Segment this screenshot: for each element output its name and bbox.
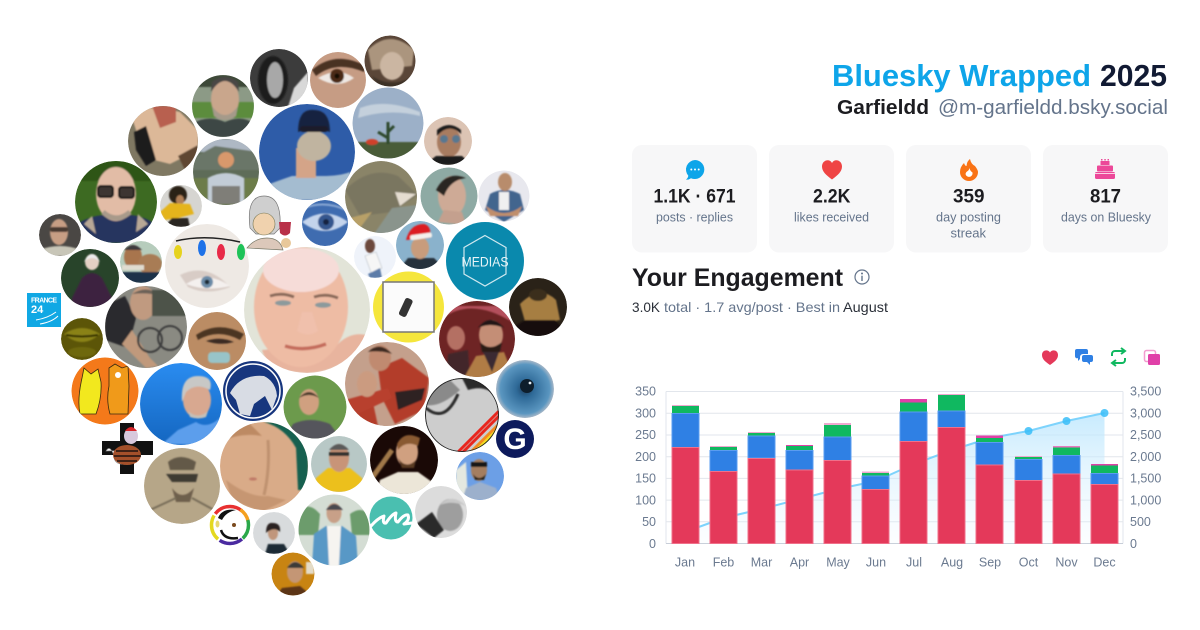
left axis labels: 150 xyxy=(635,472,656,486)
icon: speech bubble xyxy=(686,160,704,180)
left axis labels xyxy=(635,384,656,551)
right axis labels: 0 xyxy=(1130,537,1137,551)
user name and handle: Garfieldd xyxy=(837,97,929,119)
right axis labels: 3,000 xyxy=(1130,406,1161,420)
month labels: Nov xyxy=(1055,556,1078,570)
right axis labels: 1,000 xyxy=(1130,494,1161,508)
right axis labels: 2,000 xyxy=(1130,450,1161,464)
avatar: man in profile xyxy=(420,168,478,225)
month labels: Jul xyxy=(906,556,922,570)
sticker: black cross with ball xyxy=(102,423,153,474)
avatar: man in nature xyxy=(284,376,346,440)
logo: France 24 xyxy=(27,293,61,327)
stat card: likes xyxy=(769,145,894,252)
avatar: sky and plant xyxy=(352,88,424,159)
month labels: Aug xyxy=(941,556,963,570)
stat label: day posting xyxy=(936,210,1001,224)
avatar: couple in plaid shirts xyxy=(345,342,429,426)
logo: Medias hexagon: MEDIAS xyxy=(462,254,508,270)
avatar: big bald man xyxy=(244,247,370,373)
avatar: bald man with glasses xyxy=(75,161,157,243)
engagement chart xyxy=(635,384,1161,570)
user name and handle xyxy=(837,97,1168,119)
avatar: man at the sea xyxy=(140,363,222,445)
legend: reposts xyxy=(1112,348,1125,366)
legend: quotes xyxy=(1144,350,1160,365)
month labels: Oct xyxy=(1019,556,1039,570)
engagement summary: 3.0K xyxy=(632,299,661,315)
avatar: hedgehog xyxy=(345,161,418,234)
logo: Thundercats xyxy=(223,361,283,421)
cumulative line xyxy=(685,409,1108,532)
section heading: Your Engagement xyxy=(632,264,844,292)
right axis labels: 2,500 xyxy=(1130,428,1161,442)
cartoon wine glass xyxy=(279,222,291,236)
title: Bluesky Wrapped xyxy=(832,59,1091,93)
avatar: muscular torso xyxy=(220,422,308,512)
avatar: blue eye close up xyxy=(302,200,348,246)
avatar: man with cap from below xyxy=(259,104,355,200)
avatar: blue iris xyxy=(496,360,554,418)
logo: letter G: G xyxy=(503,423,527,456)
bar: Apr xyxy=(786,445,813,544)
avatar: black and white face with rainbow xyxy=(425,378,499,452)
bar: Feb xyxy=(710,446,737,544)
stat value: 359 xyxy=(953,186,984,208)
logo: Medias hexagon xyxy=(446,222,524,300)
left axis labels: 250 xyxy=(635,428,656,442)
month labels: Jun xyxy=(866,556,886,570)
bar: Jul xyxy=(900,399,927,544)
bar: Nov xyxy=(1053,446,1080,544)
bar: Oct xyxy=(1015,456,1042,544)
icon: heart xyxy=(822,160,842,180)
avatar: man with cat xyxy=(120,241,162,283)
cartoon body xyxy=(247,238,283,250)
avatar: small man with glasses xyxy=(39,214,81,256)
stat card: posts and replies xyxy=(632,145,757,252)
avatar: orange cartoon cats xyxy=(72,358,138,424)
engagement summary: total · 1.7 avg/post · Best in xyxy=(664,299,840,315)
avatar: man in blue suit xyxy=(298,494,370,566)
icon: info xyxy=(855,270,869,284)
stat card: days on Bluesky xyxy=(1043,145,1168,252)
legend: likes xyxy=(1042,350,1058,365)
logo: rainbow ring xyxy=(209,504,251,546)
cartoon hand xyxy=(281,238,291,248)
avatar: brown eye close up xyxy=(310,52,366,108)
left axis labels: 100 xyxy=(635,494,656,508)
month labels: Dec xyxy=(1093,556,1116,570)
logo: letter G xyxy=(496,420,534,458)
right axis labels: 3,500 xyxy=(1130,384,1161,398)
bar: Dec xyxy=(1091,464,1118,544)
left axis labels: 0 xyxy=(649,537,656,551)
avatar: man in blue shirt xyxy=(478,170,530,222)
month labels xyxy=(675,556,1116,570)
avatar: cartoon woman with wine xyxy=(247,196,291,250)
stat label second line: streak xyxy=(950,226,986,240)
left axis labels: 200 xyxy=(635,450,656,464)
stat value: 817 xyxy=(1090,186,1121,208)
grid lines xyxy=(666,392,1123,544)
avatar: man with bikes xyxy=(105,286,187,368)
avatar: grey man lying xyxy=(415,486,467,538)
avatar: woman on white xyxy=(354,236,396,278)
month labels: Mar xyxy=(751,556,772,570)
engagement summary xyxy=(632,299,888,315)
logo: France 24: FRANCE xyxy=(31,298,57,304)
avatar: eye with christmas lights xyxy=(165,224,249,308)
avatar cluster xyxy=(27,36,567,596)
right axis labels: 500 xyxy=(1130,515,1151,529)
right axis labels: 1,500 xyxy=(1130,472,1161,486)
avatar: chest on patterned fabric xyxy=(128,106,198,176)
stat label: posts · replies xyxy=(656,210,733,224)
left axis labels: 350 xyxy=(635,384,656,398)
cartoon face xyxy=(253,213,275,235)
icon: flame xyxy=(960,159,978,181)
avatar: brown eye with glitter xyxy=(188,312,246,370)
month labels: Feb xyxy=(713,556,734,570)
month labels: Apr xyxy=(790,556,809,570)
stat value: 2.2K xyxy=(813,186,851,208)
avatar: santa hat xyxy=(396,221,444,270)
avatar: man in floral shirt xyxy=(192,75,254,137)
bar: Jun xyxy=(862,472,889,544)
right axis labels xyxy=(1130,384,1161,551)
avatar: person with dark hair on grey xyxy=(253,512,295,554)
chart legend icons xyxy=(1042,348,1160,366)
bar: Mar xyxy=(748,432,775,544)
stat value: 1.1K · 671 xyxy=(654,186,736,208)
engagement summary: August xyxy=(843,299,888,315)
bar: Sep xyxy=(976,436,1003,544)
legend: replies xyxy=(1075,349,1093,365)
month labels: Sep xyxy=(979,556,1001,570)
avatar: man in yellow hoodie xyxy=(311,436,367,492)
avatar: purple cloak xyxy=(61,249,119,307)
logo: yellow circle with remote xyxy=(373,272,444,342)
bar: Aug xyxy=(938,394,965,544)
avatar: hiker in the mountains xyxy=(193,139,259,205)
avatar: sepia child xyxy=(364,36,416,88)
avatar: man with sunglasses and blue sky xyxy=(456,452,504,500)
stat label: days on Bluesky xyxy=(1061,210,1151,224)
user name and handle: @m-garfieldd.bsky.social xyxy=(938,97,1168,119)
bar: Jan xyxy=(672,405,699,544)
avatar: furry pilot xyxy=(509,278,567,336)
month labels: May xyxy=(826,556,851,570)
cumulative area xyxy=(685,413,1104,544)
avatar: bearded man on dark background xyxy=(370,426,438,495)
month labels: Jan xyxy=(675,556,695,570)
avatar: man on orange background xyxy=(272,552,314,596)
stacked bars xyxy=(672,394,1118,544)
icon: cake xyxy=(1095,159,1115,179)
avatar: pencil sketch xyxy=(144,448,220,524)
avatar: woman in yellow xyxy=(160,185,202,227)
stat card: posting streak xyxy=(906,145,1031,252)
title: 2025 xyxy=(1100,59,1167,93)
stat label: likes received xyxy=(794,210,869,224)
avatar: man with round glasses xyxy=(424,117,472,165)
left axis labels: 300 xyxy=(635,406,656,420)
left axis labels: 50 xyxy=(642,515,656,529)
avatar: olive lips xyxy=(61,318,103,360)
logo: teal scribble xyxy=(370,496,412,540)
bar: May xyxy=(824,423,851,544)
avatar: men in red room xyxy=(439,301,515,378)
logo: France 24: 24 xyxy=(31,304,44,316)
avatar: black and white hand xyxy=(250,49,308,107)
cartoon hair xyxy=(249,196,280,234)
